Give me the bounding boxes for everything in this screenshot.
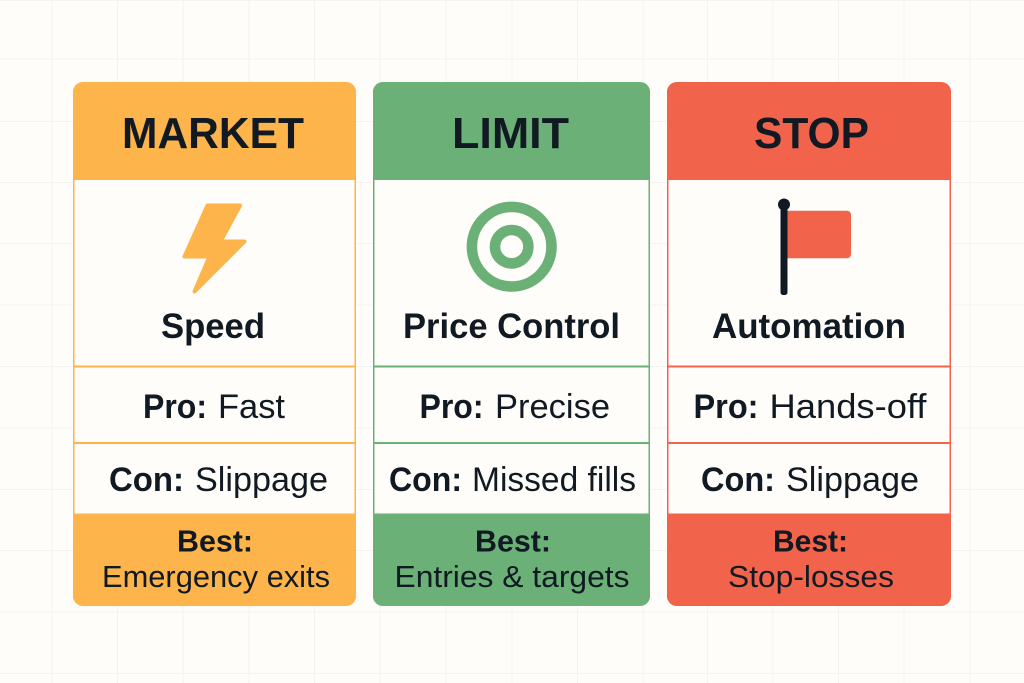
text: stop best use: Best: — [773, 524, 848, 558]
subheading: automation: Automation — [712, 307, 906, 346]
heading: stop: STOP — [754, 109, 869, 158]
text: stop best use — [728, 524, 894, 594]
text: limit con: Missed fills — [472, 461, 636, 499]
text: market pro: Pro: — [143, 388, 207, 426]
text: market con: Slippage — [195, 461, 328, 499]
icon: target — [472, 207, 552, 286]
text: stop pro: Hands-off — [770, 388, 927, 426]
heading: market: MARKET — [122, 109, 304, 158]
text: limit pro — [420, 388, 610, 426]
icon: lightning bolt — [184, 206, 244, 292]
text: limit con: Con: — [389, 461, 462, 499]
text: market best use: Best: — [177, 524, 253, 558]
panel: market — [73, 82, 356, 606]
text: market con: Con: — [109, 461, 184, 499]
subheading: price control: Price Control — [403, 307, 620, 346]
text: stop best use: Stop-losses — [728, 560, 894, 594]
text: limit pro: Pro: — [420, 388, 484, 426]
text: market pro: Fast — [218, 388, 285, 426]
text: limit pro: Precise — [495, 388, 610, 426]
text: stop con — [701, 461, 919, 499]
text: limit con — [389, 461, 636, 499]
text: stop con: Slippage — [786, 461, 919, 499]
text: market best use: Emergency exits — [102, 560, 330, 594]
text: limit best use: Best: — [475, 524, 551, 558]
text: limit best use — [394, 524, 630, 594]
text: market best use — [102, 524, 330, 594]
text: market pro — [143, 388, 285, 426]
panel: stop — [667, 82, 951, 606]
text: limit best use: Entries & targets — [394, 560, 630, 594]
text: stop pro: Pro: — [694, 388, 758, 426]
panel: limit — [373, 82, 650, 606]
text: stop con: Con: — [701, 461, 775, 499]
text: stop pro — [694, 388, 927, 426]
icon: flag — [778, 198, 851, 295]
text: market con — [109, 461, 328, 499]
subheading: speed: Speed — [161, 307, 265, 346]
heading: limit: LIMIT — [452, 109, 569, 158]
